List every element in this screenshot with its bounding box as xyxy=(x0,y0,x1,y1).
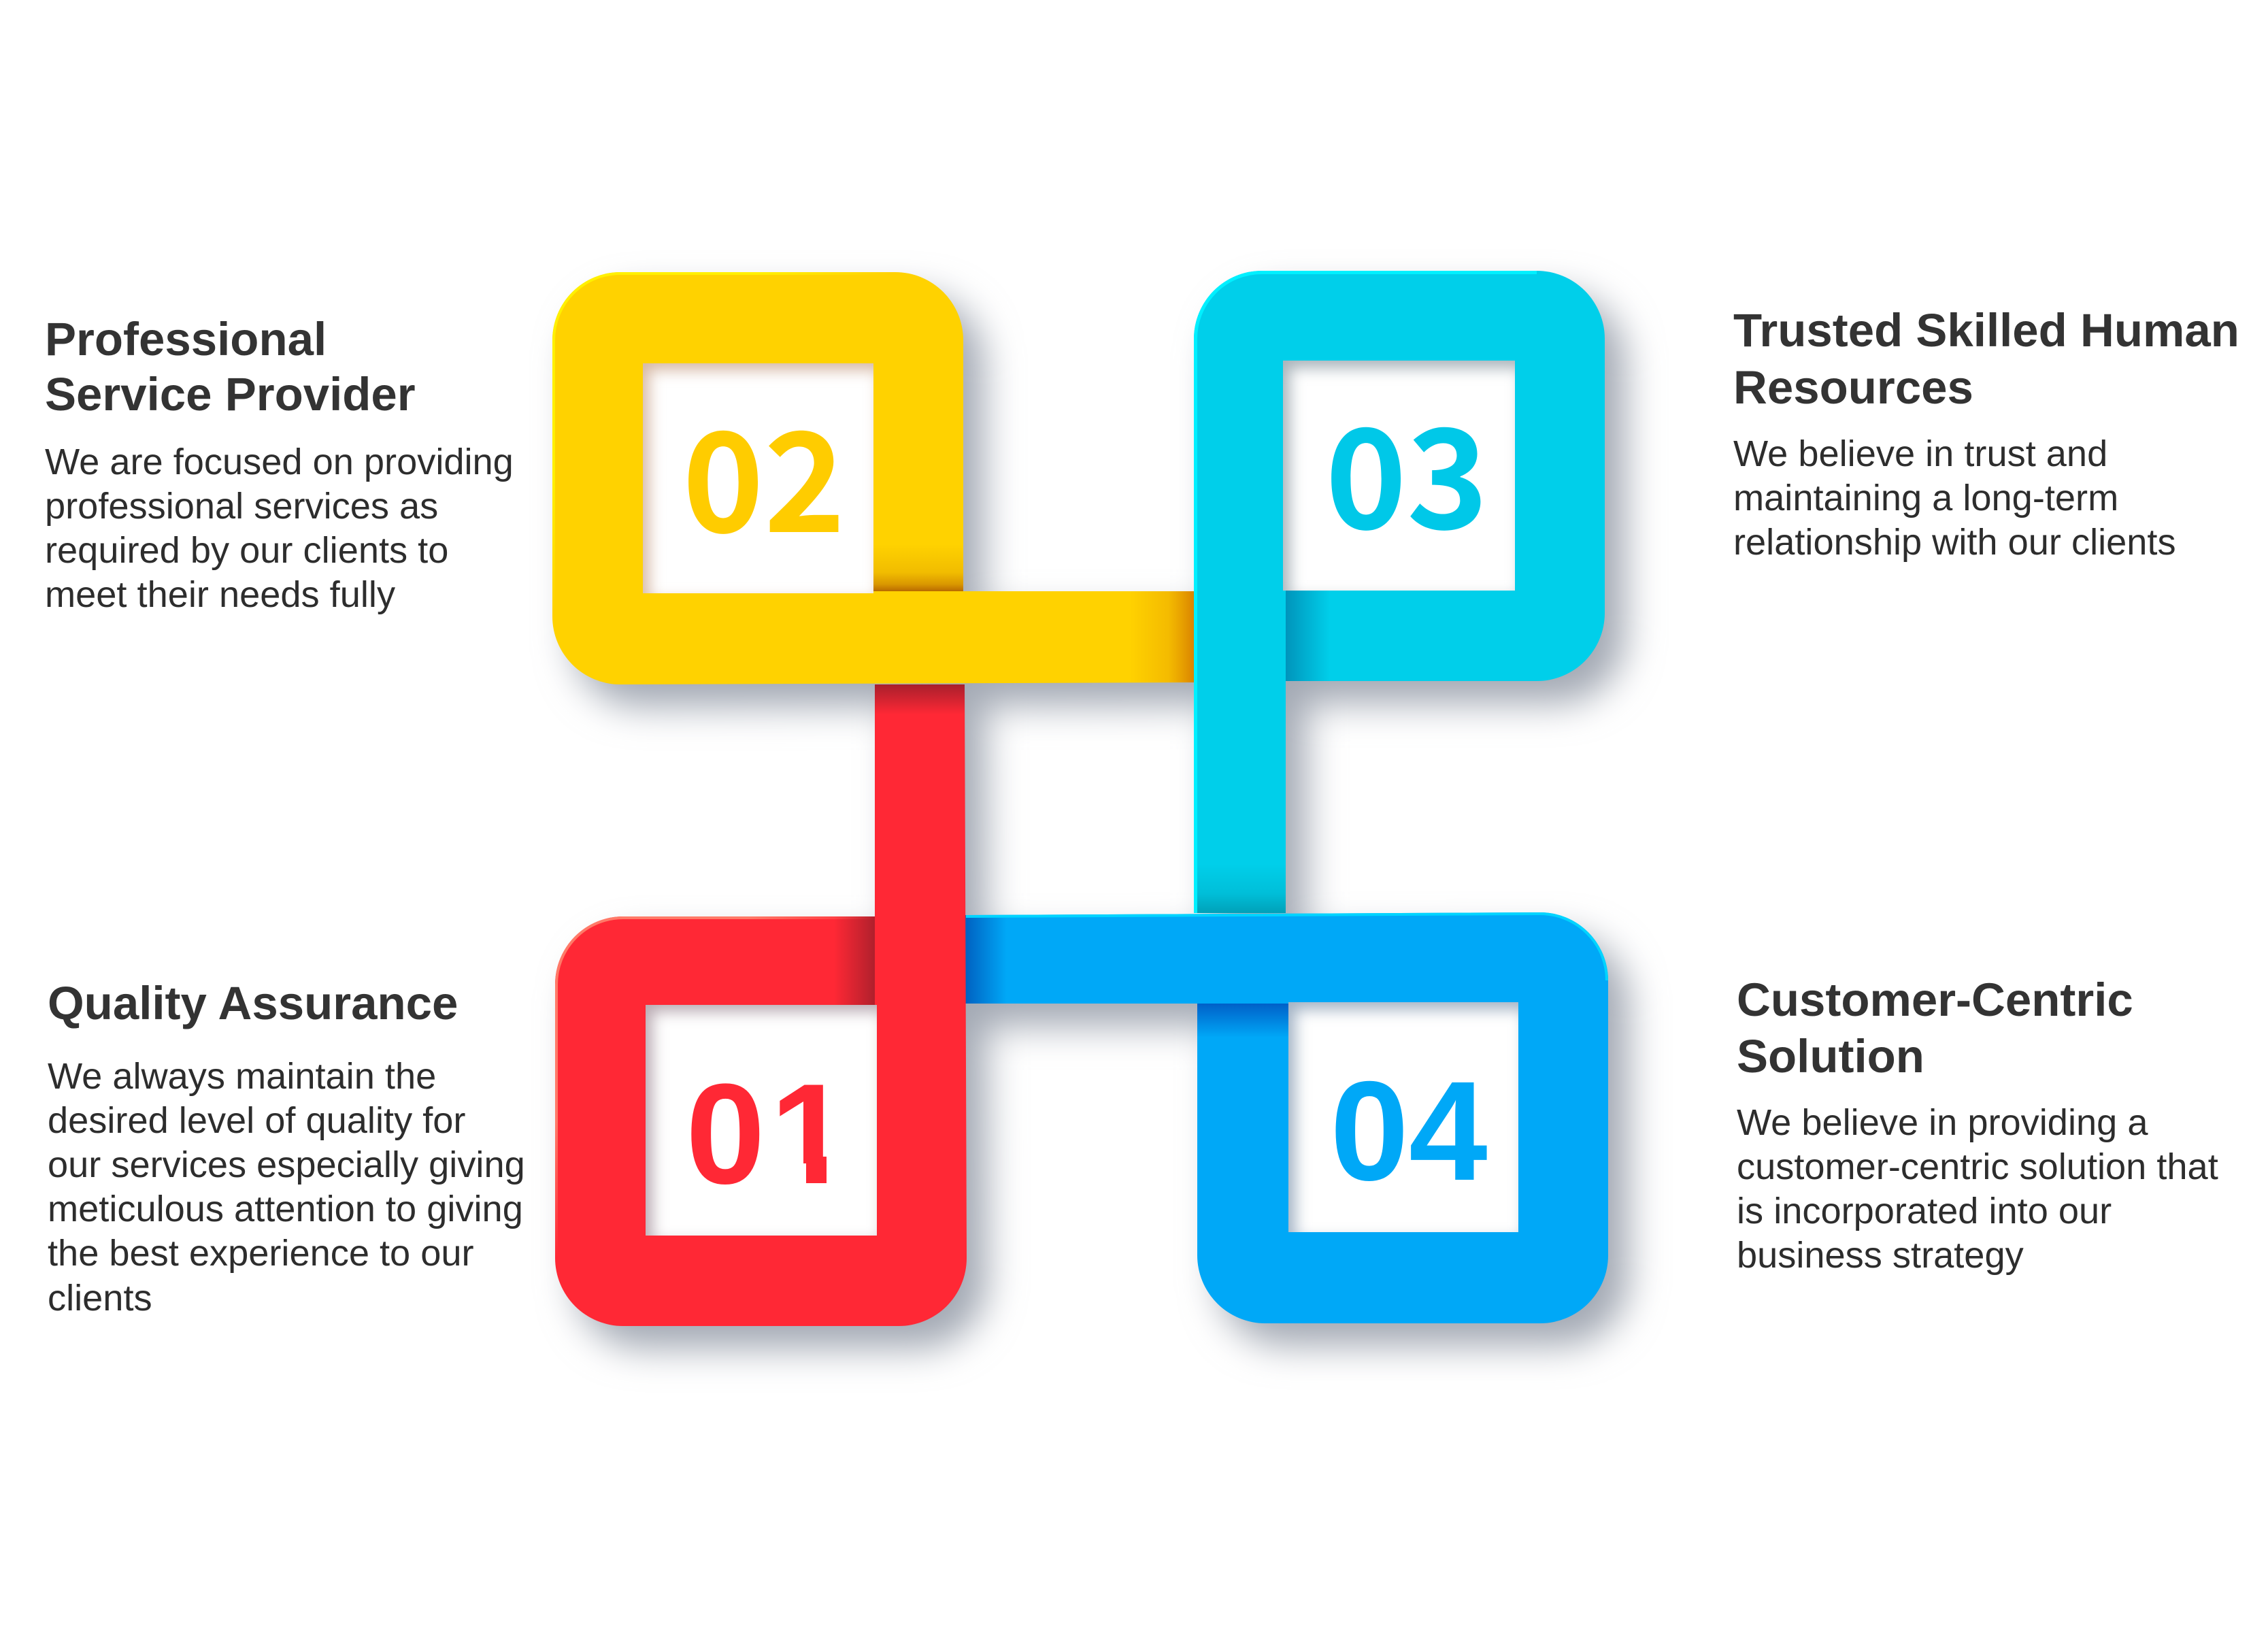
description: We believe in providing a xyxy=(1737,1102,2148,1143)
description: relationship with our clients xyxy=(1733,522,2176,563)
description: customer-centric solution that xyxy=(1737,1146,2218,1187)
panel: step 03 cyan frame with stem xyxy=(1194,271,1605,913)
window: blue frame opening with inner shadow xyxy=(1288,1002,1518,1232)
description: business strategy xyxy=(1737,1235,2024,1276)
description: the best experience to our xyxy=(48,1233,474,1274)
number 02: 02 xyxy=(682,373,846,572)
panel: step 01 red frame with stem xyxy=(555,684,967,1326)
description: professional services as xyxy=(45,486,438,527)
number 01: 01 xyxy=(686,1054,850,1214)
text block: Trusted Skilled Human Resources xyxy=(1733,304,2239,563)
number 04: 04 xyxy=(1330,1053,1488,1210)
description: meet their needs fully xyxy=(45,574,395,615)
description: maintaining a long-term xyxy=(1733,478,2118,518)
description: our services especially giving xyxy=(48,1144,525,1185)
drop shadows of the four frames xyxy=(573,293,1629,1348)
number 03: 03 xyxy=(1325,369,1488,569)
heading: Solution xyxy=(1737,1030,1924,1082)
heading: Customer-Centric xyxy=(1737,974,2133,1026)
text block: Customer-Centric Solution xyxy=(1737,974,2218,1276)
window: red frame opening with inner shadow xyxy=(646,1005,877,1236)
panel: step 02 yellow frame with connector xyxy=(552,272,1195,684)
window: cyan frame opening with inner shadow xyxy=(1283,361,1515,591)
text block: Quality Assurance xyxy=(48,977,525,1319)
description: desired level of quality for xyxy=(48,1100,465,1141)
panel: step 04 blue frame with connector xyxy=(965,912,1608,1323)
heading: Resources xyxy=(1733,361,1973,414)
description: We believe in trust and xyxy=(1733,433,2107,474)
description: meticulous attention to giving xyxy=(48,1189,523,1229)
heading: Trusted Skilled Human xyxy=(1733,304,2239,357)
text block: Professional Service Provider xyxy=(45,313,514,615)
heading: Quality Assurance xyxy=(48,977,458,1029)
description: We always maintain the xyxy=(48,1056,436,1097)
description: clients xyxy=(48,1278,152,1319)
heading: Service Provider xyxy=(45,368,416,420)
window: yellow frame opening with inner shadow xyxy=(643,363,873,593)
description: is incorporated into our xyxy=(1737,1191,2112,1231)
heading: Professional xyxy=(45,313,327,365)
description: We are focused on providing xyxy=(45,442,514,482)
description: required by our clients to xyxy=(45,530,448,571)
